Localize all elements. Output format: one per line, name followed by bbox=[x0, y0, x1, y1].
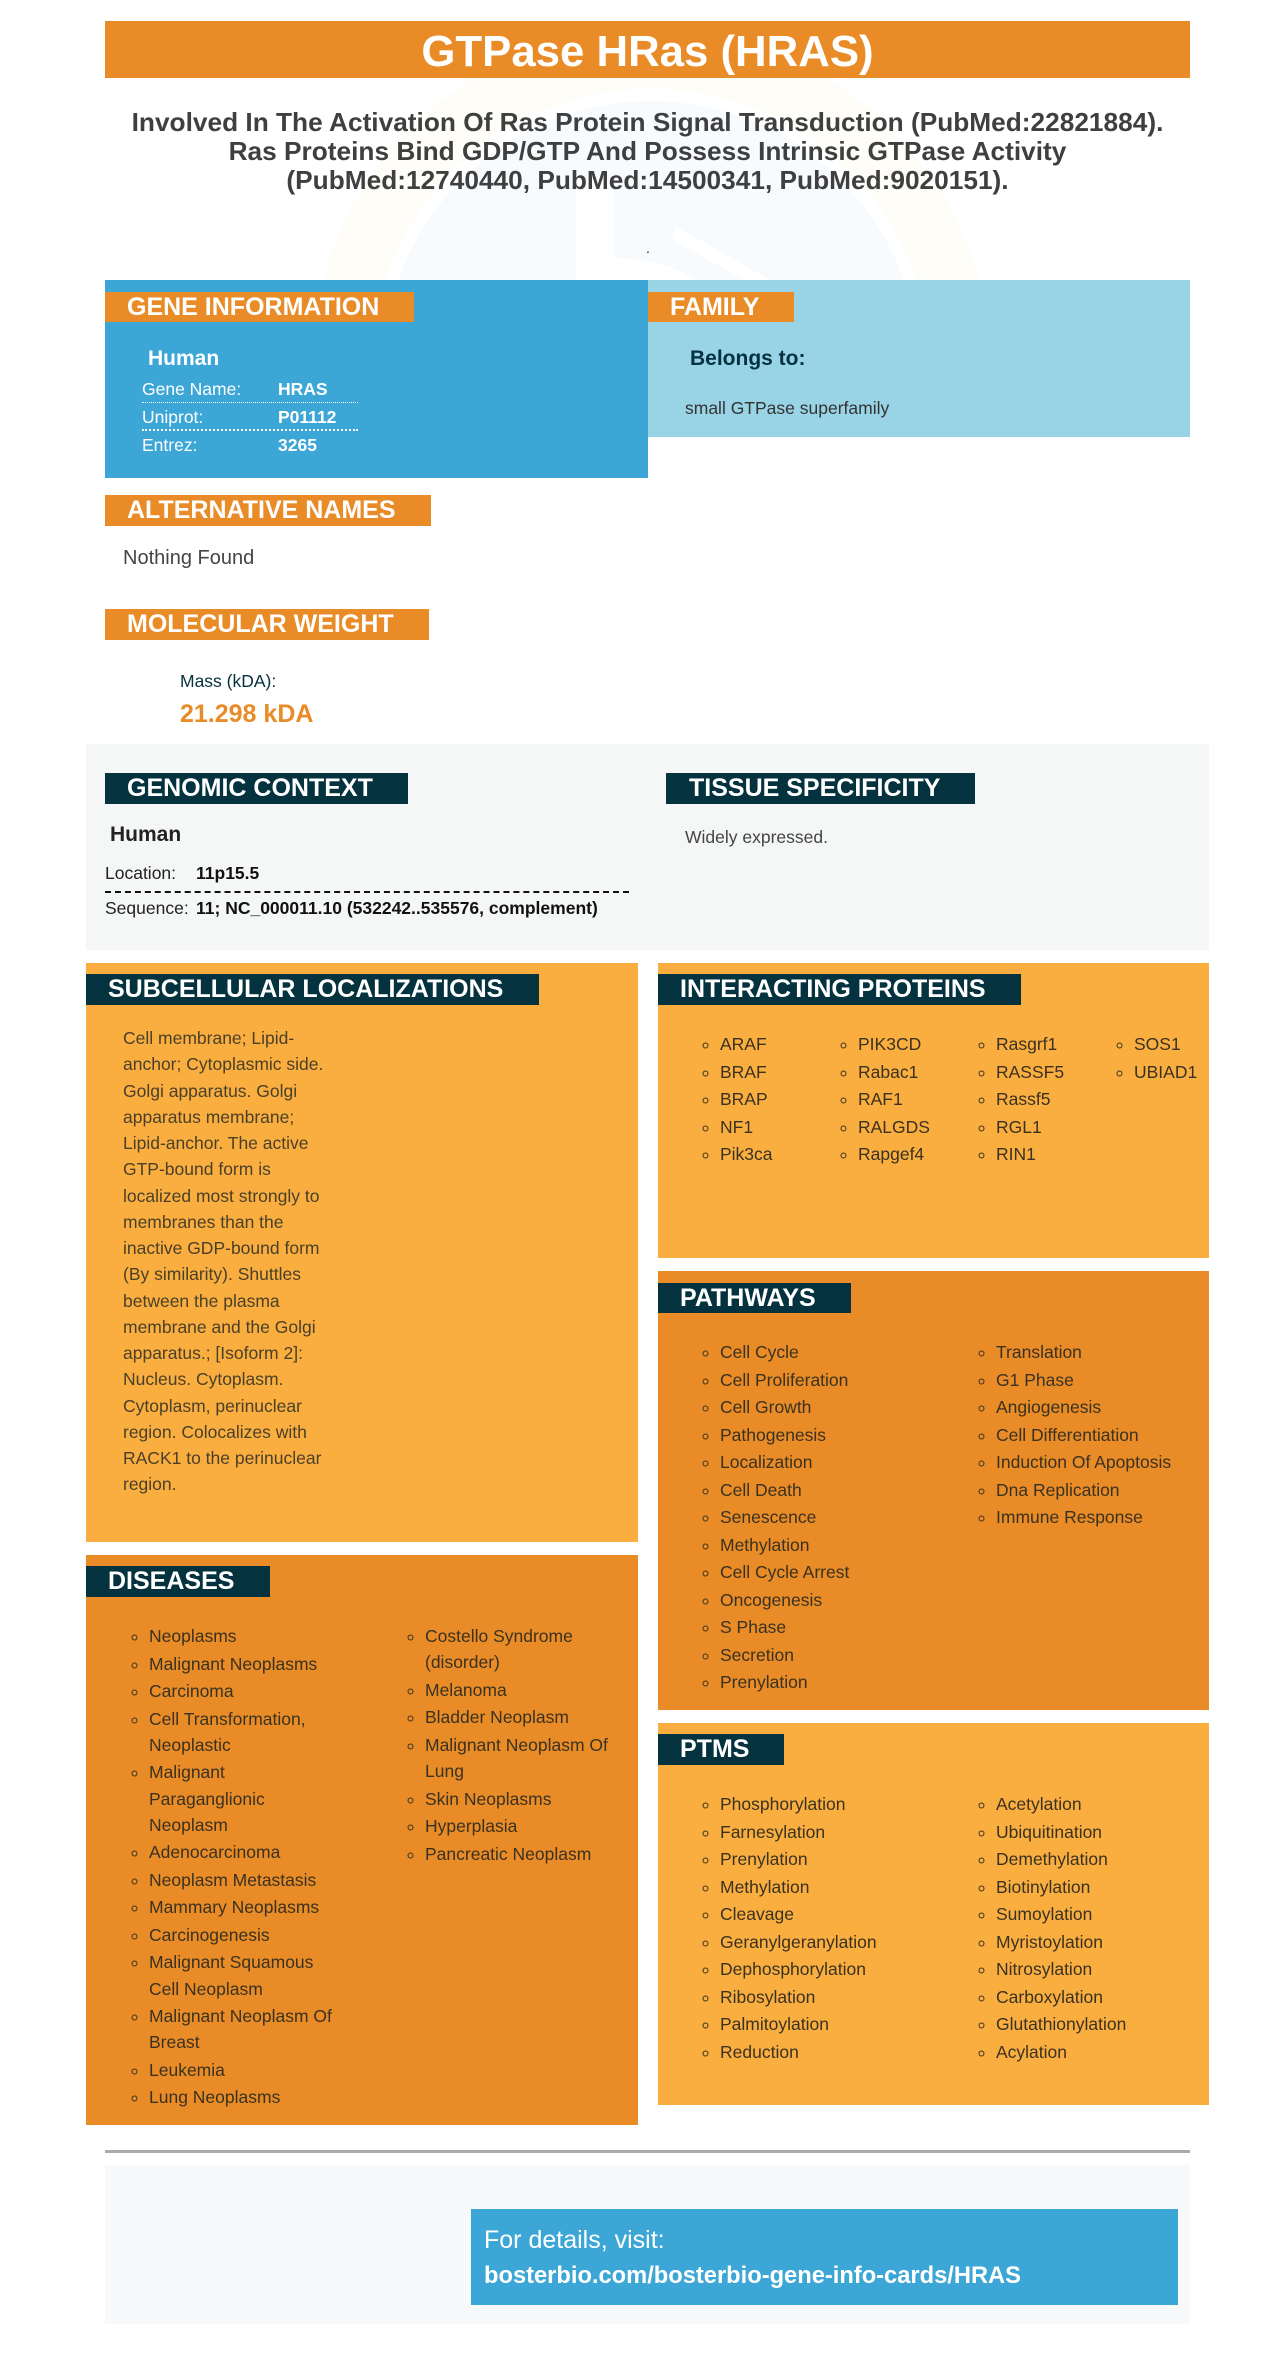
callout label: For details, visit: bbox=[484, 2226, 665, 2254]
disease list column 1: Mammary Neoplasms bbox=[149, 1897, 319, 1917]
localization text: (By similarity). Shuttles bbox=[123, 1264, 301, 1284]
panel: diseases bbox=[86, 1555, 638, 2125]
location row: Location: bbox=[105, 863, 176, 883]
family text: small GTPase superfamily bbox=[685, 398, 889, 418]
heading: genomic context: GENOMIC CONTEXT bbox=[127, 774, 373, 802]
pathway list column 2: Cell Differentiation bbox=[996, 1424, 1139, 1444]
protein list column 3: Rassf5 bbox=[996, 1089, 1050, 1109]
protein list column 1: NF1 bbox=[720, 1116, 753, 1136]
entrez row bbox=[142, 435, 317, 455]
localization text: Lipid-anchor. The active bbox=[123, 1133, 308, 1153]
title banner bbox=[105, 21, 1190, 78]
disease list column 1: Carcinoma bbox=[149, 1681, 234, 1701]
summary text: Involved In The Activation Of Ras Protein Signal Transduction (PubMed:22821884). bbox=[132, 107, 1163, 137]
pathway list column 1: Cell Death bbox=[720, 1480, 802, 1500]
localization text: membrane and the Golgi bbox=[123, 1317, 316, 1337]
localization text: Nucleus. Cytoplasm. bbox=[123, 1369, 283, 1389]
ptm list column 1: Reduction bbox=[720, 2042, 799, 2062]
gene name row: Gene Name: bbox=[142, 379, 241, 399]
heading: molecular weight: MOLECULAR WEIGHT bbox=[127, 610, 394, 638]
disease list column 2: Pancreatic Neoplasm bbox=[425, 1844, 591, 1864]
pathway list column 2: G1 Phase bbox=[996, 1370, 1074, 1390]
belongs to label: Belongs to: bbox=[690, 347, 806, 370]
pathway list column 2: Dna Replication bbox=[996, 1480, 1120, 1500]
protein list column 3: Rasgrf1 bbox=[996, 1034, 1057, 1054]
panel: genomic context and tissue specificity bbox=[86, 744, 1209, 950]
species label: Human bbox=[110, 823, 181, 846]
pathway list column 1: Oncogenesis bbox=[720, 1590, 822, 1610]
panel: subcellular localizations bbox=[86, 963, 638, 1542]
ptm list column 2: Nitrosylation bbox=[996, 1959, 1092, 1979]
disease list column 1: Neoplastic bbox=[149, 1735, 231, 1755]
protein list column 2: Rapgef4 bbox=[858, 1144, 924, 1164]
ptm list column 2: Ubiquitination bbox=[996, 1822, 1102, 1842]
ptm list column 2: Acylation bbox=[996, 2042, 1067, 2062]
summary text: (PubMed:12740440, PubMed:14500341, PubMed:9020151). bbox=[286, 165, 1009, 195]
uniprot row: P01112 bbox=[278, 407, 336, 427]
ptm list column 1 bbox=[702, 1794, 877, 2062]
panel: ptms bbox=[658, 1723, 1209, 2105]
species label: Human bbox=[148, 347, 219, 370]
localization text: inactive GDP-bound form bbox=[123, 1238, 319, 1258]
protein list column 1: ARAF bbox=[720, 1034, 767, 1054]
pathway list column 1: Methylation bbox=[720, 1534, 810, 1554]
pathway list column 2 bbox=[978, 1342, 1171, 1527]
disease list column 2: Hyperplasia bbox=[425, 1816, 517, 1836]
protein list column 2: RALGDS bbox=[858, 1116, 930, 1136]
disease list column 2: Malignant Neoplasm Of bbox=[425, 1735, 608, 1755]
ptm list column 1: Prenylation bbox=[720, 1849, 808, 1869]
disease list column 1: Malignant bbox=[149, 1762, 225, 1782]
localization text: Cell membrane; Lipid- bbox=[123, 1028, 294, 1048]
title banner: GTPase HRas (HRAS) bbox=[421, 27, 874, 76]
protein list column 4: SOS1 bbox=[1134, 1034, 1181, 1054]
gene name row: HRAS bbox=[278, 379, 328, 399]
pathway list column 1: Cell Cycle Arrest bbox=[720, 1562, 849, 1582]
ptm list column 1: Phosphorylation bbox=[720, 1794, 846, 1814]
heading: family bbox=[648, 292, 794, 322]
alternative names text: Nothing Found bbox=[123, 547, 254, 569]
pathway list column 1 bbox=[702, 1342, 850, 1692]
disease list column 1: Leukemia bbox=[149, 2060, 225, 2080]
pathway list column 2: Angiogenesis bbox=[996, 1397, 1101, 1417]
heading: alternative names: ALTERNATIVE NAMES bbox=[127, 496, 396, 524]
pathway list column 1: Cell Proliferation bbox=[720, 1370, 848, 1390]
protein list column 2: PIK3CD bbox=[858, 1034, 921, 1054]
pathway list column 1: Pathogenesis bbox=[720, 1424, 826, 1444]
protein list column 1: Pik3ca bbox=[720, 1144, 773, 1164]
pathway list column 1: Secretion bbox=[720, 1644, 794, 1664]
heading: diseases: DISEASES bbox=[108, 1567, 234, 1595]
panel: footer bbox=[105, 2165, 1190, 2324]
disease list column 1: Lung Neoplasms bbox=[149, 2087, 280, 2107]
uniprot row bbox=[142, 404, 358, 431]
protein list column 3 bbox=[978, 1034, 1064, 1164]
summary text: Ras Proteins Bind GDP/GTP And Possess Intrinsic GTPase Activity bbox=[229, 136, 1066, 166]
pathway list column 1: Prenylation bbox=[720, 1672, 808, 1692]
ptm list column 2: Myristoylation bbox=[996, 1932, 1103, 1952]
tissue specificity text: Widely expressed. bbox=[685, 827, 828, 847]
ptm list column 2 bbox=[978, 1794, 1126, 2062]
protein list column 2: Rabac1 bbox=[858, 1062, 918, 1082]
ptm list column 1: Geranylgeranylation bbox=[720, 1932, 877, 1952]
heading: family: FAMILY bbox=[670, 293, 759, 321]
pathway list column 1: Senescence bbox=[720, 1507, 816, 1527]
pathway list column 2: Translation bbox=[996, 1342, 1082, 1362]
disease list column 1: Breast bbox=[149, 2032, 200, 2052]
disease list column 1: Neoplasm Metastasis bbox=[149, 1870, 316, 1890]
disease list column 2: Melanoma bbox=[425, 1680, 507, 1700]
disease list column 1: Paraganglionic bbox=[149, 1788, 265, 1808]
sequence row: 11; NC_000011.10 (532242..535576, complement) bbox=[196, 898, 598, 918]
pathway list column 2: Induction Of Apoptosis bbox=[996, 1452, 1171, 1472]
disease list column 1: Malignant Neoplasm Of bbox=[149, 2006, 332, 2026]
disease list column 2: Costello Syndrome bbox=[425, 1626, 573, 1646]
heading: subcellular localizations: SUBCELLULAR LOCALIZATIONS bbox=[108, 975, 503, 1003]
disease list column 1: Neoplasms bbox=[149, 1626, 237, 1646]
disease list column 1: Neoplasm bbox=[149, 1815, 228, 1835]
protein list column 3: RGL1 bbox=[996, 1116, 1042, 1136]
localization text: GTP-bound form is bbox=[123, 1159, 271, 1179]
protein list column 1: BRAP bbox=[720, 1089, 768, 1109]
mass label: Mass (kDA): bbox=[180, 671, 276, 691]
protein list column 1: BRAF bbox=[720, 1062, 767, 1082]
callout: details link bbox=[471, 2209, 1178, 2305]
heading: tissue specificity: TISSUE SPECIFICITY bbox=[689, 774, 940, 802]
localization text: Cytoplasm, perinuclear bbox=[123, 1396, 302, 1416]
heading: pathways bbox=[658, 1283, 851, 1313]
ptm list column 1: Ribosylation bbox=[720, 1986, 815, 2006]
pathway list column 1: Cell Growth bbox=[720, 1397, 811, 1417]
gene name row bbox=[142, 376, 358, 403]
small dot: . bbox=[646, 240, 650, 256]
ptm list column 1: Dephosphorylation bbox=[720, 1959, 866, 1979]
localization text: localized most strongly to bbox=[123, 1186, 319, 1206]
disease list column 1: Malignant Neoplasms bbox=[149, 1654, 317, 1674]
pathway list column 2: Immune Response bbox=[996, 1507, 1143, 1527]
localization text: apparatus.; [Isoform 2]: bbox=[123, 1343, 303, 1363]
localization text: apparatus membrane; bbox=[123, 1107, 294, 1127]
localization text: region. bbox=[123, 1474, 177, 1494]
ptm list column 2: Acetylation bbox=[996, 1794, 1082, 1814]
localization text bbox=[123, 1028, 323, 1494]
protein list column 4 bbox=[1116, 1034, 1197, 1082]
heading: ptms bbox=[658, 1734, 784, 1765]
protein list column 1 bbox=[702, 1034, 773, 1164]
panel: family bbox=[648, 280, 1190, 437]
disease list column 2: Bladder Neoplasm bbox=[425, 1707, 569, 1727]
disease list column 2 bbox=[408, 1626, 608, 1864]
location row: 11p15.5 bbox=[196, 863, 259, 883]
sequence row: Sequence: bbox=[105, 898, 189, 918]
disease list column 1 bbox=[132, 1626, 332, 2107]
disease list column 1: Carcinogenesis bbox=[149, 1925, 270, 1945]
callout url: bosterbio.com/bosterbio-gene-info-cards/HRAS bbox=[484, 2263, 1021, 2289]
panel: interacting proteins bbox=[658, 963, 1209, 1258]
disease list column 1: Cell Neoplasm bbox=[149, 1978, 263, 1998]
disease list column 1: Malignant Squamous bbox=[149, 1952, 313, 1972]
entrez row: 3265 bbox=[278, 435, 317, 455]
disease list column 1: Cell Transformation, bbox=[149, 1708, 306, 1728]
ptm list column 2: Glutathionylation bbox=[996, 2014, 1126, 2034]
uniprot row: Uniprot: bbox=[142, 407, 203, 427]
localization text: membranes than the bbox=[123, 1212, 284, 1232]
pathway list column 1: S Phase bbox=[720, 1617, 786, 1637]
localization text: Golgi apparatus. Golgi bbox=[123, 1080, 297, 1100]
summary text bbox=[132, 107, 1163, 195]
heading: interacting proteins: INTERACTING PROTEINS bbox=[680, 975, 986, 1003]
disease list column 2: Lung bbox=[425, 1761, 464, 1781]
panel: gene information bbox=[105, 280, 648, 478]
ptm list column 1: Palmitoylation bbox=[720, 2014, 829, 2034]
location row bbox=[105, 861, 629, 893]
ptm list column 1: Methylation bbox=[720, 1876, 810, 1896]
mass value: 21.298 kDA bbox=[180, 700, 313, 728]
localization text: region. Colocalizes with bbox=[123, 1422, 307, 1442]
ptm list column 2: Carboxylation bbox=[996, 1986, 1103, 2006]
protein list column 4: UBIAD1 bbox=[1134, 1062, 1197, 1082]
localization text: between the plasma bbox=[123, 1290, 280, 1310]
disease list column 1: Adenocarcinoma bbox=[149, 1842, 280, 1862]
background logo watermark bbox=[0, 0, 1288, 280]
localization text: anchor; Cytoplasmic side. bbox=[123, 1054, 323, 1074]
heading: ptms: PTMS bbox=[680, 1735, 749, 1763]
pathway list column 1: Cell Cycle bbox=[720, 1342, 799, 1362]
heading: diseases bbox=[86, 1566, 270, 1597]
protein list column 2 bbox=[840, 1034, 930, 1164]
ptm list column 1: Cleavage bbox=[720, 1904, 794, 1924]
panel: pathways bbox=[658, 1271, 1209, 1710]
heading: gene information: GENE INFORMATION bbox=[127, 293, 379, 321]
ptm list column 1: Farnesylation bbox=[720, 1822, 825, 1842]
ptm list column 2: Demethylation bbox=[996, 1849, 1108, 1869]
protein list column 3: RASSF5 bbox=[996, 1062, 1064, 1082]
protein list column 2: RAF1 bbox=[858, 1089, 903, 1109]
disease list column 2: (disorder) bbox=[425, 1652, 500, 1672]
localization text: RACK1 to the perinuclear bbox=[123, 1448, 321, 1468]
heading: pathways: PATHWAYS bbox=[680, 1284, 816, 1312]
ptm list column 2: Sumoylation bbox=[996, 1904, 1092, 1924]
disease list column 2: Skin Neoplasms bbox=[425, 1788, 551, 1808]
pathway list column 1: Localization bbox=[720, 1452, 812, 1472]
entrez row: Entrez: bbox=[142, 435, 197, 455]
ptm list column 2: Biotinylation bbox=[996, 1876, 1090, 1896]
protein list column 3: RIN1 bbox=[996, 1144, 1036, 1164]
